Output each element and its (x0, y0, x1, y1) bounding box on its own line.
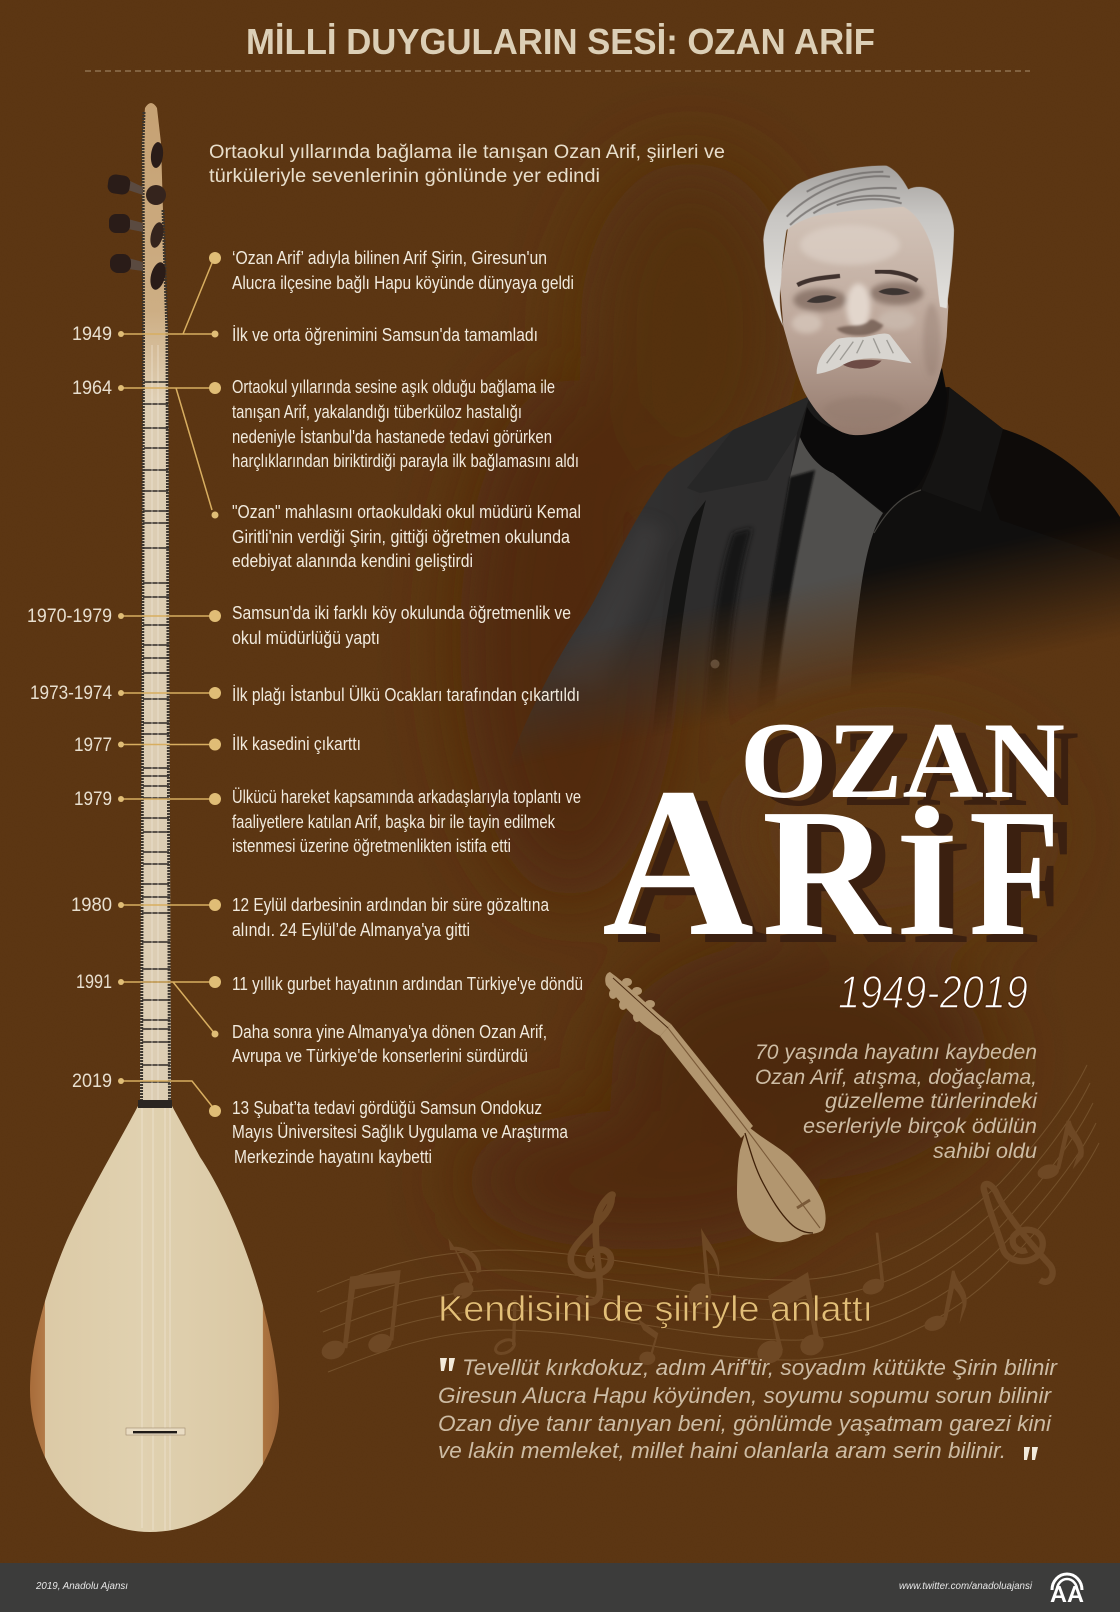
intro text (209, 142, 725, 187)
summary text: eserleriyle birçok ödülün (803, 1115, 1037, 1138)
timeline events text: okul müdürlüğü yaptı (232, 628, 380, 648)
icon: lower note (922, 1271, 967, 1334)
illustration: baglama instrument (30, 103, 279, 1532)
timeline events text: istenmesi üzerine öğretmenlikten istifa etti (232, 836, 511, 856)
baglama neck (140, 103, 171, 1105)
life dates: 1949-2019 (838, 966, 1028, 1018)
moustache (817, 334, 912, 374)
timeline events text: edebiyat alanında kendini geliştirdi (232, 551, 473, 571)
icon: opening quote mark (440, 1358, 455, 1371)
timeline events text: İlk plağı İstanbul Ülkü Ocakları tarafından çıkartıldı (232, 685, 580, 705)
timeline events text: Daha sonra yine Almanya'ya dönen Ozan Arif, (232, 1022, 547, 1042)
title: MİLLİ DUYGULARIN SESİ: OZAN ARİF (246, 21, 875, 62)
timeline years: 2019 (72, 1071, 112, 1092)
bridge (126, 1428, 185, 1435)
timeline years: 1991 (76, 972, 112, 993)
summary text (755, 1041, 1038, 1163)
timeline events text: 13 Şubat’ta tedavi gördüğü Samsun Ondokuz (232, 1098, 542, 1118)
intro text: Ortaokul yıllarında bağlama ile tanışan Ozan Arif, şiirleri ve (209, 142, 725, 163)
collars (692, 398, 808, 482)
poem quote: ve lakin memleket, millet haini olanlarla aram serin bilinir. (438, 1438, 1006, 1463)
icon: thin note (860, 1233, 886, 1297)
timeline events text: harçlıklarından biriktirdiği parayla ilk bağlamasını aldı (232, 451, 579, 471)
head (763, 166, 954, 435)
timeline years (27, 324, 112, 1092)
timeline events text: ‘Ozan Arif’ adıyla bilinen Arif Şirin, Giresun'un (232, 248, 547, 268)
timeline events text: 12 Eylül darbesinin ardından bir süre gözaltına (232, 895, 550, 915)
timeline years: 1977 (74, 735, 112, 756)
timeline events text: nedeniyle İstanbul'da hastanede tedavi görürken (232, 427, 552, 447)
white name (602, 700, 1065, 981)
icon: flag note (448, 1238, 481, 1302)
button (710, 660, 720, 668)
timeline years: 1970-1979 (27, 606, 112, 627)
summary text: güzelleme türlerindeki (825, 1090, 1038, 1113)
shadow of name: R (776, 779, 906, 982)
shadow of name: A (616, 752, 768, 989)
timeline events text: "Ozan" mahlasını ortaokuldaki okul müdürü Kemal (232, 502, 581, 522)
icon: right clef and notes group (860, 1121, 1084, 1334)
mouth (840, 360, 882, 369)
timeline years: 1980 (71, 895, 112, 916)
timeline events text: Avrupa ve Türkiye'de konserlerini sürdürdü (232, 1046, 528, 1066)
poem quote: Tevellüt kırkdokuz, adım Arif'tir, soyadım kütükte Şirin bilinir (462, 1355, 1059, 1380)
white name: R (762, 771, 892, 974)
timeline years: 1964 (72, 378, 112, 399)
timeline years: 1979 (74, 789, 112, 810)
timeline events text: 11 yıllık gurbet hayatının ardından Türkiye'ye döndü (232, 974, 583, 994)
poem quote: Ozan diye tanır tanıyan beni, gönlümde yaşatmam garezi kini (438, 1411, 1052, 1436)
icon: beamed notes (319, 1270, 401, 1363)
nose (837, 320, 883, 335)
icon: small baglama silhouette (605, 972, 826, 1242)
timeline years: 1973-1974 (30, 683, 112, 704)
timeline events text: Alucra ilçesine bağlı Hapu köyünde dünyaya geldi (232, 273, 574, 293)
shadow of name: OZAN (754, 708, 1079, 829)
name: OZAN ARİF (602, 700, 1079, 989)
turtleneck (800, 368, 946, 487)
neck mosaic edges (142, 112, 170, 1103)
frets (142, 382, 170, 1082)
icon: small beamed note (637, 1318, 658, 1365)
eyes (807, 288, 910, 303)
timeline years: 1949 (72, 324, 112, 345)
timeline events text: faaliyetlere katılan Arif, başka bir ile tayin edilmek (232, 812, 556, 832)
footer (0, 1563, 1120, 1612)
timeline events text: tanışan Arif, yakalandığı tüberküloz hastalığı (232, 402, 522, 422)
intro text: türküleriyle sevenlerinin gönlünde yer edindi (209, 166, 600, 187)
icon: open note (493, 1300, 517, 1356)
strings (142, 345, 170, 1530)
background music staff and notes (317, 1065, 1099, 1372)
timeline events text: Samsun'da iki farklı köy okulunda öğretmenlik ve (232, 603, 571, 623)
baglama body (30, 1106, 279, 1532)
poem quote (438, 1355, 1059, 1463)
timeline events text (232, 248, 583, 1167)
shadow of name: F (983, 779, 1074, 982)
title divider (85, 70, 1030, 72)
icon: treble clef right (984, 1184, 1053, 1282)
summary text: 70 yaşında hayatını kaybeden (755, 1041, 1037, 1064)
white name: İ (896, 801, 958, 967)
shadow of name (616, 708, 1079, 989)
footer credit: 2019, Anadolu Ajansı (35, 1581, 128, 1592)
icon: Anadolu Agency logo: AA (1050, 1581, 1084, 1607)
white name: OZAN (740, 700, 1065, 821)
icon: centre beamed note (754, 1272, 827, 1367)
icon: treble clef left (571, 1195, 613, 1302)
timeline connector lines (120, 263, 215, 1110)
timeline events text: Mayıs Üniversitesi Sağlık Uygulama ve Araştırma (232, 1122, 569, 1142)
white name: A (602, 744, 754, 981)
hair (763, 166, 954, 327)
coat (518, 387, 1120, 742)
icon: upper centre note (685, 1228, 719, 1312)
timeline events text: Giritli'nin verdiği Şirin, gittiği öğretmen okulunda (232, 527, 571, 547)
photo: Ozan Arif portrait (518, 165, 1120, 742)
timeline events text: Ortaokul yıllarında sesine aşık olduğu bağlama ile (232, 377, 555, 397)
summary text: Ozan Arif, atışma, doğaçlama, (755, 1066, 1037, 1089)
timeline events text: Merkezinde hayatını kaybetti (234, 1147, 432, 1167)
timeline events text: Ülkücü hareket kapsamında arkadaşlarıyla toplantı ve (232, 787, 581, 807)
face (780, 197, 948, 435)
icon: closing quote mark (1024, 1447, 1038, 1460)
icon: upper note (1036, 1121, 1084, 1181)
white name: F (969, 771, 1060, 974)
poem quote: Giresun Alucra Hapu köyünden, soyumu sopumu sorun bilinir (438, 1383, 1053, 1408)
eyebrows (797, 271, 917, 285)
timeline events text: alındı. 24 Eylül’de Almanya'ya gitti (232, 920, 470, 940)
tuning pegs (107, 141, 168, 291)
timeline dots (118, 252, 221, 1117)
timeline events text: İlk kasedini çıkarttı (232, 734, 361, 754)
poem heading: Kendisini de şiiriyle anlattı (438, 1288, 873, 1329)
nut (138, 1100, 172, 1108)
hair strands (787, 172, 902, 225)
summary text: sahibi oldu (933, 1140, 1037, 1163)
face shading (792, 225, 940, 423)
sweater (778, 438, 883, 688)
footer url: www.twitter.com/anadoluajansi (899, 1581, 1033, 1592)
icon: left beamed notes and clef group (319, 1195, 658, 1365)
coat front panel (768, 434, 797, 598)
shadow of name: İ (910, 809, 972, 975)
timeline events text: İlk ve orta öğrenimini Samsun'da tamamladı (232, 325, 538, 345)
